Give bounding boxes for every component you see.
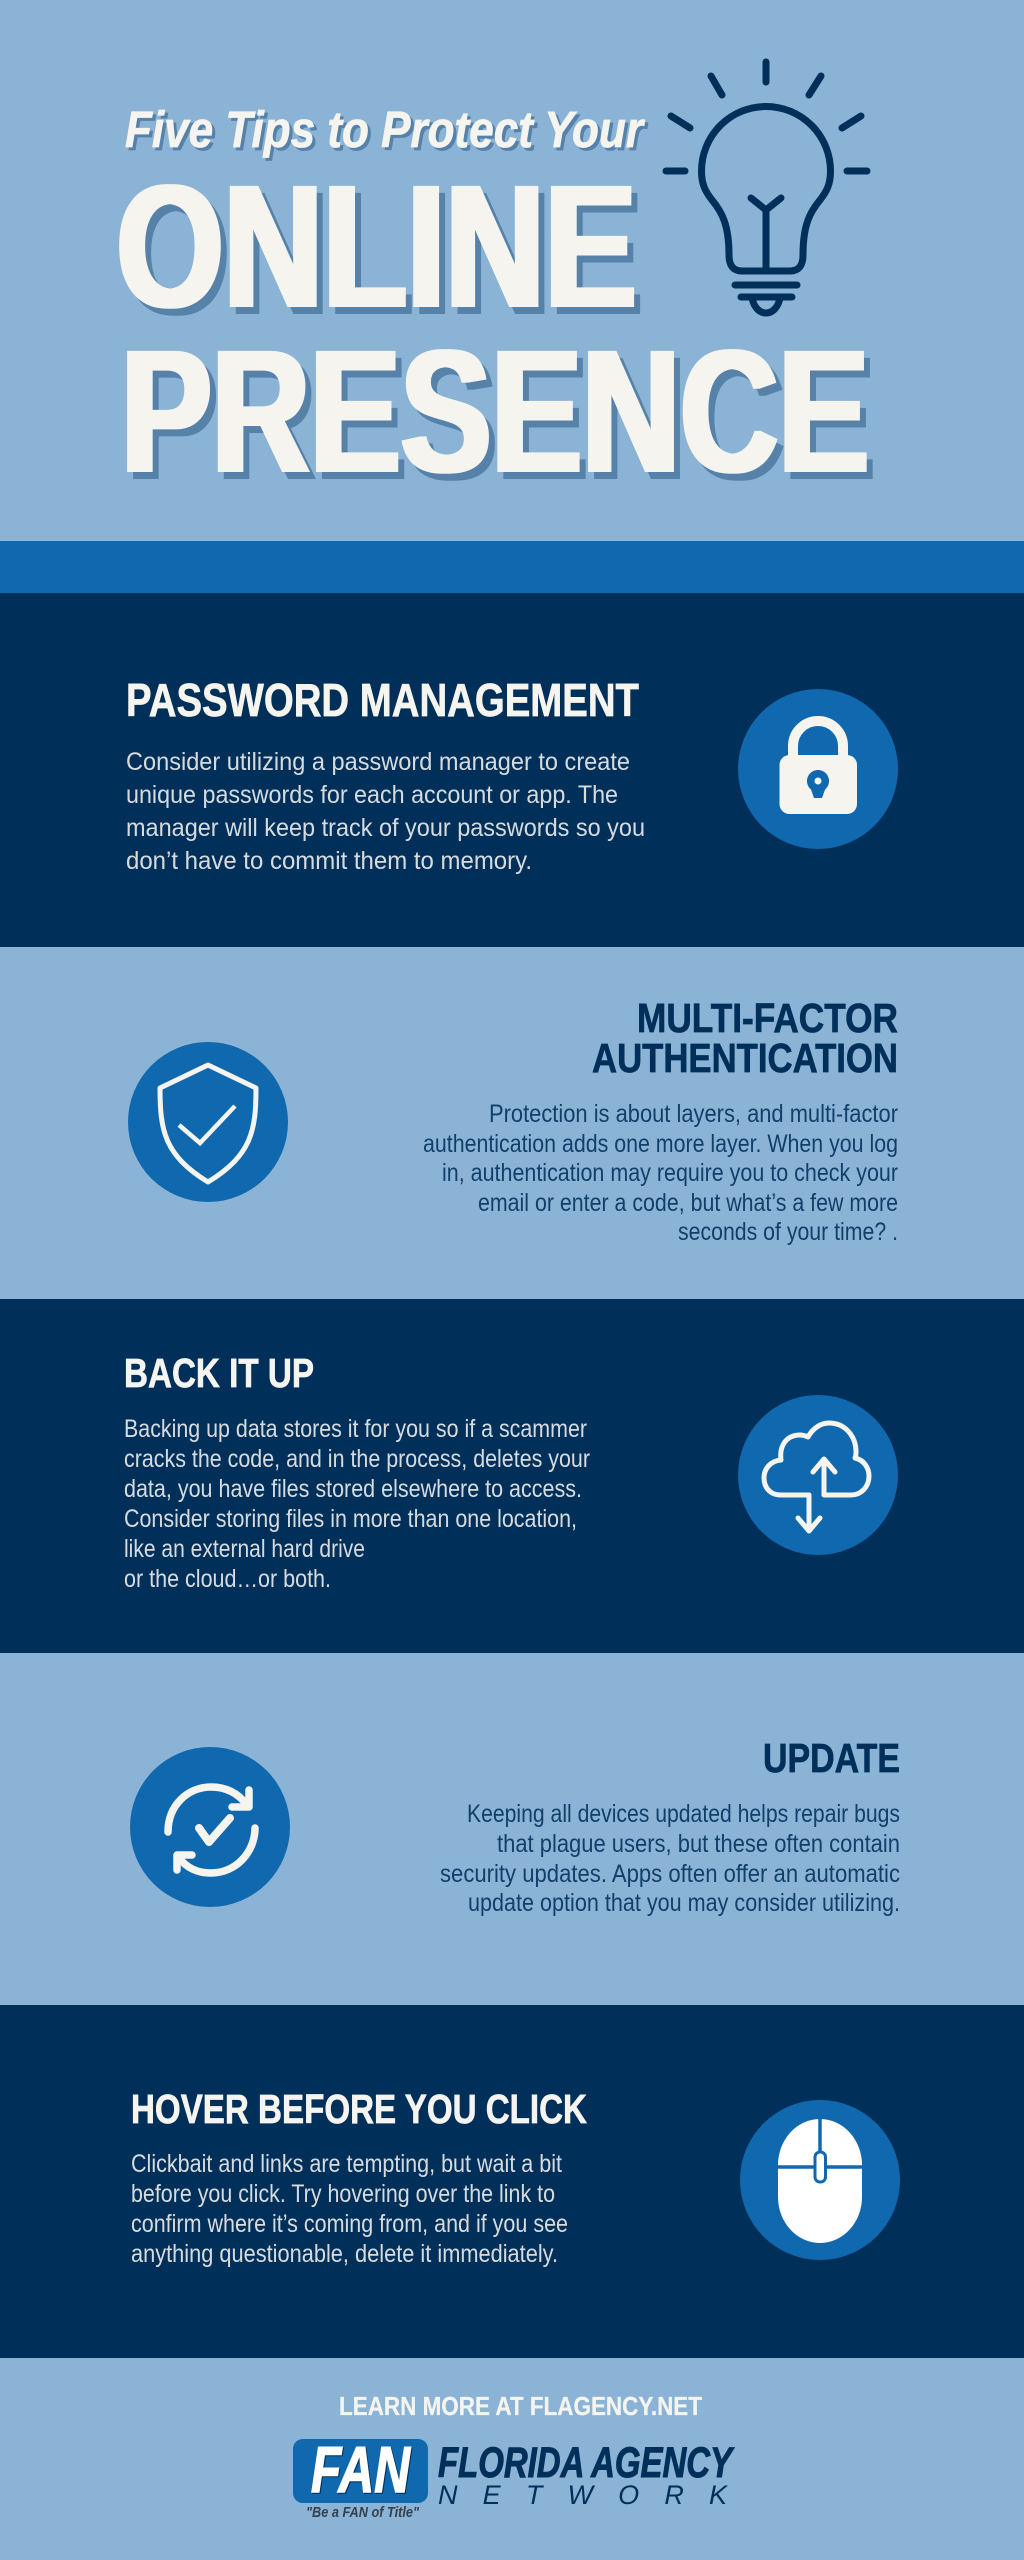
panel background bbox=[0, 2005, 1024, 2358]
heading: AUTHENTICATION bbox=[592, 1035, 898, 1081]
heading bbox=[592, 995, 898, 1081]
body text: seconds of your time? . bbox=[678, 1218, 898, 1246]
icon: shield with check bbox=[128, 1042, 288, 1202]
body text bbox=[124, 1415, 590, 1593]
body text: in, authentication may require you to check your bbox=[442, 1159, 898, 1187]
body text: email or enter a code, but what’s a few more bbox=[478, 1189, 898, 1217]
icon: light bulb bbox=[666, 62, 867, 313]
panel: multi-factor authentication bbox=[128, 995, 898, 1246]
heading: UPDATE bbox=[763, 1735, 900, 1781]
panel: back it up bbox=[0, 1299, 1024, 1653]
body text: Keeping all devices updated helps repair bugs bbox=[467, 1800, 900, 1828]
logo: wordmark: FLORIDA AGENCY bbox=[438, 2439, 735, 2487]
panel: hover before you click bbox=[0, 2005, 1024, 2358]
body text: security updates. Apps often offer an automatic bbox=[440, 1860, 900, 1888]
heading: MULTI-FACTOR bbox=[637, 995, 898, 1041]
panel background bbox=[0, 593, 1024, 947]
body text: Clickbait and links are tempting, but wait a bit bbox=[131, 2150, 562, 2178]
heading: PASSWORD MANAGEMENT bbox=[126, 674, 639, 726]
header panel bbox=[116, 62, 869, 510]
icon: cloud with arrows bbox=[738, 1395, 898, 1555]
body text: manager will keep track of your passwords so you bbox=[126, 814, 645, 842]
title line 1: ONLINE bbox=[116, 149, 636, 345]
logo: FAN badge: FAN bbox=[311, 2433, 412, 2506]
body text: authentication adds one more layer. When you log bbox=[423, 1130, 898, 1158]
logo: wordmark bbox=[438, 2439, 735, 2510]
panel background bbox=[0, 1299, 1024, 1653]
body text bbox=[423, 1100, 898, 1246]
body text: Consider utilizing a password manager to create bbox=[126, 748, 630, 776]
body text: unique passwords for each account or app. The bbox=[126, 781, 618, 809]
footer panel bbox=[293, 2391, 735, 2521]
body text: that plague users, but these often contain bbox=[497, 1830, 900, 1858]
body text bbox=[131, 2150, 568, 2268]
panel: password management bbox=[0, 593, 1024, 947]
body text: Backing up data stores it for you so if a scammer bbox=[124, 1415, 587, 1443]
subtitle: Five Tips to Protect Your bbox=[125, 101, 646, 158]
icon: padlock bbox=[738, 689, 898, 849]
body text: data, you have files stored elsewhere to access. bbox=[124, 1475, 582, 1503]
body text: before you click. Try hovering over the link to bbox=[131, 2180, 555, 2208]
logo: wordmark: NETWORK bbox=[438, 2480, 728, 2510]
body text: Protection is about layers, and multi-factor bbox=[489, 1100, 898, 1128]
body text: like an external hard drive bbox=[124, 1535, 365, 1563]
panel: update bbox=[130, 1735, 900, 1917]
logo: tagline: "Be a FAN of Title" bbox=[306, 2504, 420, 2521]
body text bbox=[440, 1800, 900, 1917]
body text: confirm where it’s coming from, and if you see bbox=[131, 2210, 568, 2238]
body text: update option that you may consider utilizing. bbox=[468, 1889, 900, 1917]
body text: anything questionable, delete it immediately. bbox=[131, 2240, 558, 2268]
body text bbox=[126, 748, 645, 875]
icon: computer mouse bbox=[740, 2100, 900, 2260]
icon: refresh with check bbox=[130, 1747, 290, 1907]
body text: or the cloud…or both. bbox=[124, 1565, 331, 1593]
heading: HOVER BEFORE YOU CLICK bbox=[131, 2086, 587, 2132]
body text: cracks the code, and in the process, deletes your bbox=[124, 1445, 590, 1473]
accent band bbox=[0, 541, 1024, 593]
call to action: LEARN MORE AT FLAGENCY.NET bbox=[339, 2391, 702, 2421]
body text: Consider storing files in more than one location, bbox=[124, 1505, 577, 1533]
heading: BACK IT UP bbox=[124, 1350, 314, 1396]
body text: don’t have to commit them to memory. bbox=[126, 847, 532, 875]
